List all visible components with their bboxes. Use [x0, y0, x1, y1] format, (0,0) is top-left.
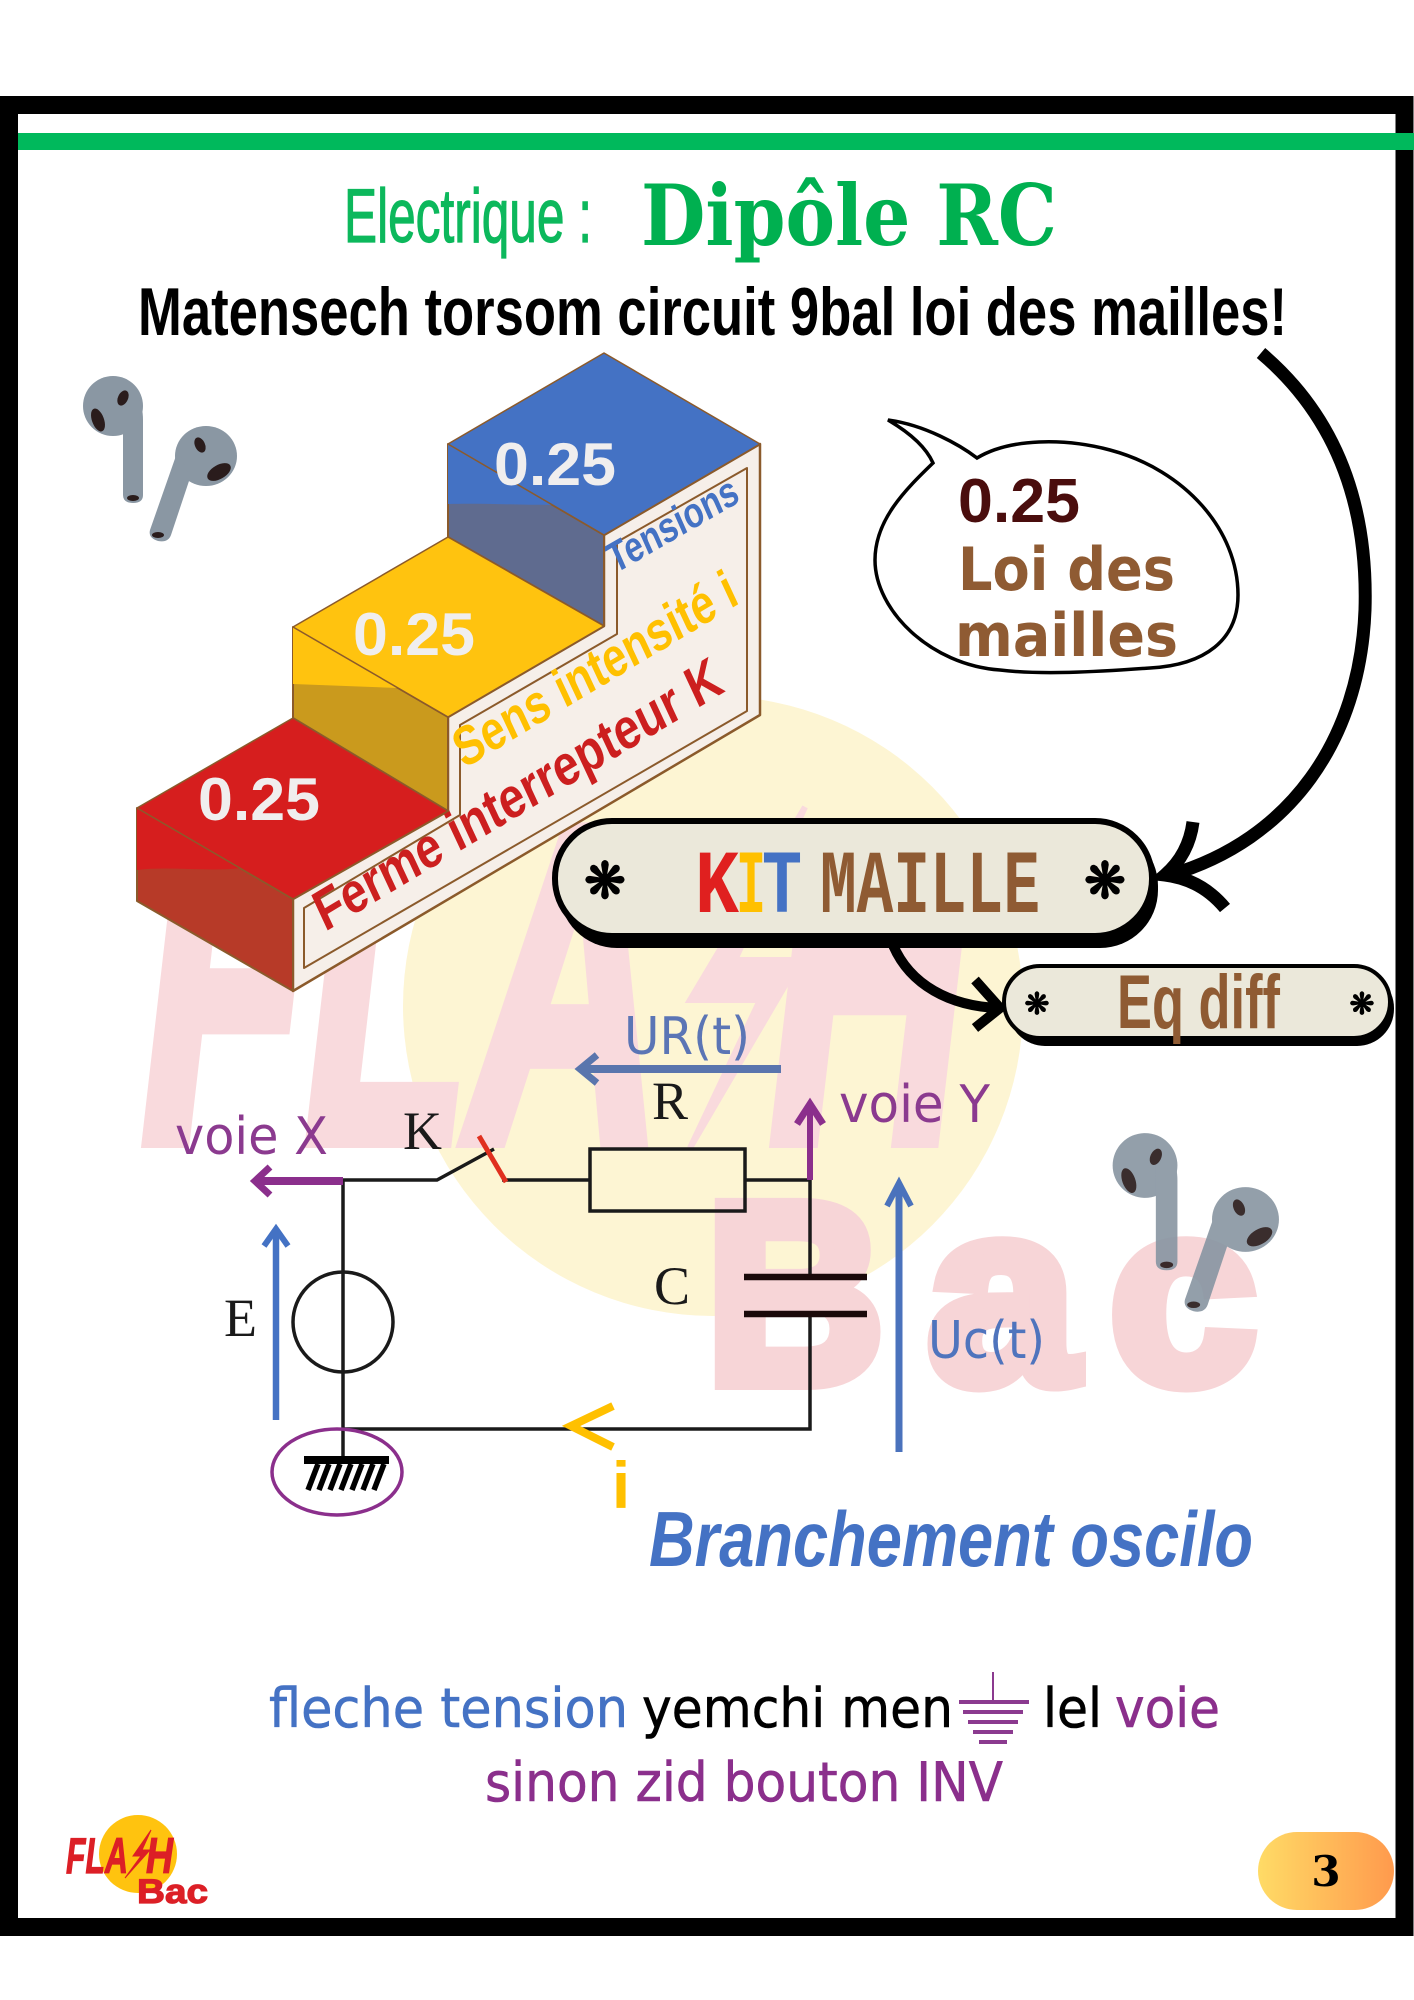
watermark: FLASH: H — [770, 734, 974, 1236]
note line 2: sinon zid bouton INV — [485, 1751, 1003, 1814]
title: Dipole RC: Dipôle RC — [641, 166, 1057, 265]
arrow: voie X — [255, 1167, 343, 1195]
note line 1 — [269, 1677, 1220, 1740]
yellow step: 0.25 — [353, 601, 475, 668]
pill: KIT MAILLE: I — [736, 838, 766, 940]
title: Electrique: Electrique : — [344, 174, 592, 259]
pill: KIT MAILLE: K — [695, 838, 740, 940]
pill: Eq diff: ❋ — [1024, 987, 1050, 1022]
circuit wires — [293, 1149, 810, 1456]
side face with labels — [293, 444, 760, 991]
pill: KIT MAILLE: T — [762, 838, 802, 940]
speech bubble: 0.25 — [958, 467, 1080, 536]
arrow: big curved from subtitle to kit maille — [1165, 353, 1365, 908]
speech bubble: Loi des — [958, 535, 1175, 605]
pill: KIT MAILLE — [555, 821, 1158, 948]
arrow: voie Y — [797, 1104, 823, 1180]
icon: airpods top left — [83, 376, 237, 541]
pill: Eq diff: ❋ — [1349, 987, 1375, 1022]
yellow step — [293, 537, 604, 811]
watermark: Bac: a — [928, 1151, 1078, 1437]
speech bubble — [875, 420, 1238, 673]
switch red mark — [479, 1136, 506, 1182]
pill: Eq diff — [1004, 960, 1394, 1046]
component labels: C — [654, 1256, 690, 1316]
component labels: R — [652, 1071, 688, 1131]
label: UR(t): UR(t) — [624, 1007, 750, 1067]
component labels — [224, 1071, 690, 1348]
red step: 0.25 — [198, 766, 320, 833]
pill: KIT MAILLE: MAILLE — [820, 838, 1040, 940]
watermark: Bac: c — [1110, 1151, 1256, 1437]
page number badge — [1258, 1832, 1394, 1910]
circuit diagram — [175, 1007, 1045, 1522]
note line 1: yemchi men — [642, 1677, 953, 1740]
arrow: E tension — [264, 1229, 288, 1420]
icon: airpods right — [1113, 1133, 1279, 1312]
logo: FLASH Bac: Bac — [137, 1873, 208, 1911]
logo: FLASH Bac: FLA — [66, 1828, 128, 1884]
logo: FLASH Bac — [66, 1815, 208, 1911]
caption: Branchement oscilo: Branchement oscilo — [649, 1495, 1253, 1583]
icon: ground symbol in note — [959, 1672, 1029, 1742]
label: i: i — [612, 1448, 630, 1522]
pill: KIT MAILLE: ❋ — [584, 852, 626, 910]
side face with labels: Ferme interrepteur K — [303, 644, 732, 943]
green header bar — [18, 133, 1414, 150]
watermark: Bac: B — [706, 1151, 884, 1437]
arrow: UR(t) — [580, 1055, 781, 1083]
ground purple circle — [272, 1429, 402, 1515]
side face with labels: Sens intensité i — [444, 559, 746, 780]
arrow: current i — [571, 1406, 613, 1447]
watermark: yellow circle — [403, 696, 1023, 1316]
capacitor plates — [744, 1277, 867, 1314]
pill: Eq diff: Eq diff — [1117, 960, 1280, 1045]
label: voie X: voie X — [175, 1107, 328, 1167]
pill: KIT MAILLE: ❋ — [1084, 852, 1126, 910]
blue step — [448, 353, 760, 626]
component labels: E — [224, 1288, 257, 1348]
arrow: Uc tension — [887, 1183, 911, 1452]
watermark: FLASH: FLA — [142, 734, 662, 1236]
arrow: small curved to eq diff — [893, 945, 1000, 1028]
speech bubble: mailles — [955, 601, 1178, 671]
blue step: 0.25 — [494, 431, 616, 498]
side face with labels: Tensions — [600, 466, 745, 582]
label: voie Y: voie Y — [839, 1075, 990, 1135]
red step — [137, 718, 448, 991]
note line 1: lel — [1043, 1677, 1102, 1740]
logo: FLASH Bac: H — [146, 1828, 174, 1884]
staircase diagram — [137, 353, 760, 991]
component labels: K — [403, 1101, 442, 1161]
label: Uc(t): Uc(t) — [928, 1311, 1045, 1371]
page number badge: 3 — [1311, 1847, 1341, 1896]
note line 1: fleche tension — [269, 1677, 628, 1740]
watermark: Bac — [706, 1151, 1256, 1437]
note line 1: voie — [1115, 1677, 1220, 1740]
ground symbol — [304, 1456, 389, 1490]
